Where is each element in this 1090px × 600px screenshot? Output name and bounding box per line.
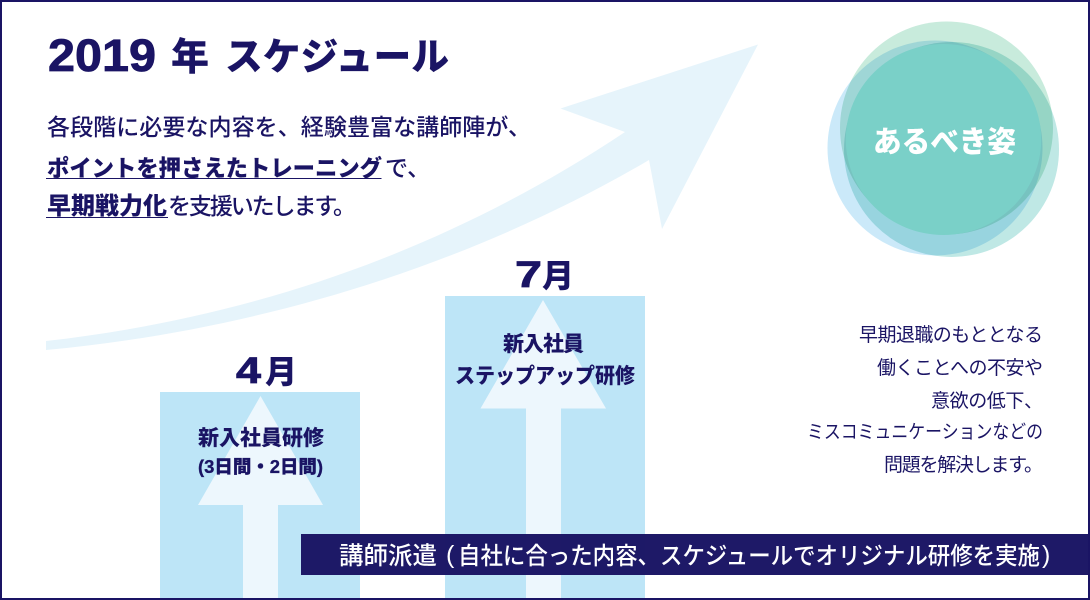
april panel bbox=[160, 392, 360, 598]
goal circles bbox=[828, 22, 1059, 257]
title year digits: 2019 bbox=[48, 30, 156, 81]
instructor dispatch banner bbox=[301, 534, 1089, 575]
intro text bbox=[46, 114, 531, 220]
underline 2 bbox=[46, 217, 168, 218]
april course duration: (3日間・2日間) bbox=[198, 457, 323, 477]
right description bbox=[807, 324, 1043, 476]
green circle bbox=[840, 22, 1053, 234]
july month kanji: 月 bbox=[542, 258, 574, 294]
description line 2: 働くことへの不安や bbox=[877, 357, 1043, 379]
big rising arrow bbox=[46, 44, 758, 350]
april up arrow bbox=[198, 396, 323, 598]
banner lead text: 講師派遣 bbox=[339, 542, 437, 570]
april column bbox=[160, 350, 360, 598]
banner detail text: 自社に合った内容、スケジュールでオリジナル研修を実施 bbox=[458, 543, 1040, 570]
july panel bbox=[445, 296, 645, 598]
blue circle bbox=[828, 40, 1042, 256]
intro line 3 emphasis: 早期戦力化 bbox=[47, 193, 167, 220]
description line 1: 早期退職のもととなる bbox=[859, 324, 1043, 346]
description line 5: 問題を解決します。 bbox=[884, 454, 1043, 476]
pale teal circle bbox=[844, 42, 1059, 257]
banner open paren: ( bbox=[446, 541, 455, 569]
title schedule word: スケジュール bbox=[225, 37, 449, 79]
description line 4: ミスコミュニケーションなどの bbox=[807, 421, 1043, 443]
intro line 2 tail: で、 bbox=[385, 155, 430, 181]
july column bbox=[445, 254, 645, 598]
goal label: あるべき姿 bbox=[873, 126, 1016, 159]
july course title line 1: 新入社員 bbox=[503, 333, 584, 356]
banner close paren: ) bbox=[1042, 541, 1050, 569]
banner background bbox=[301, 534, 1089, 575]
title year kanji: 年 bbox=[171, 37, 209, 79]
july month digit: 7 bbox=[515, 254, 542, 295]
intro line 3 tail: を支援いたします。 bbox=[168, 193, 356, 219]
underline 1 bbox=[46, 178, 382, 179]
intro line 2 emphasis: ポイントを押さえたトレーニング bbox=[47, 155, 382, 181]
july up arrow bbox=[480, 300, 606, 598]
april course title: 新入社員研修 bbox=[198, 427, 324, 450]
intro line 1: 各段階に必要な内容を、経験豊富な講師陣が、 bbox=[47, 114, 531, 140]
description line 3: 意欲の低下、 bbox=[931, 390, 1043, 412]
april month digit: 4 bbox=[236, 350, 262, 391]
april month kanji: 月 bbox=[265, 354, 297, 390]
main circle bbox=[846, 44, 1041, 235]
title bbox=[48, 30, 449, 81]
july course title line 2: ステップアップ研修 bbox=[455, 365, 635, 388]
